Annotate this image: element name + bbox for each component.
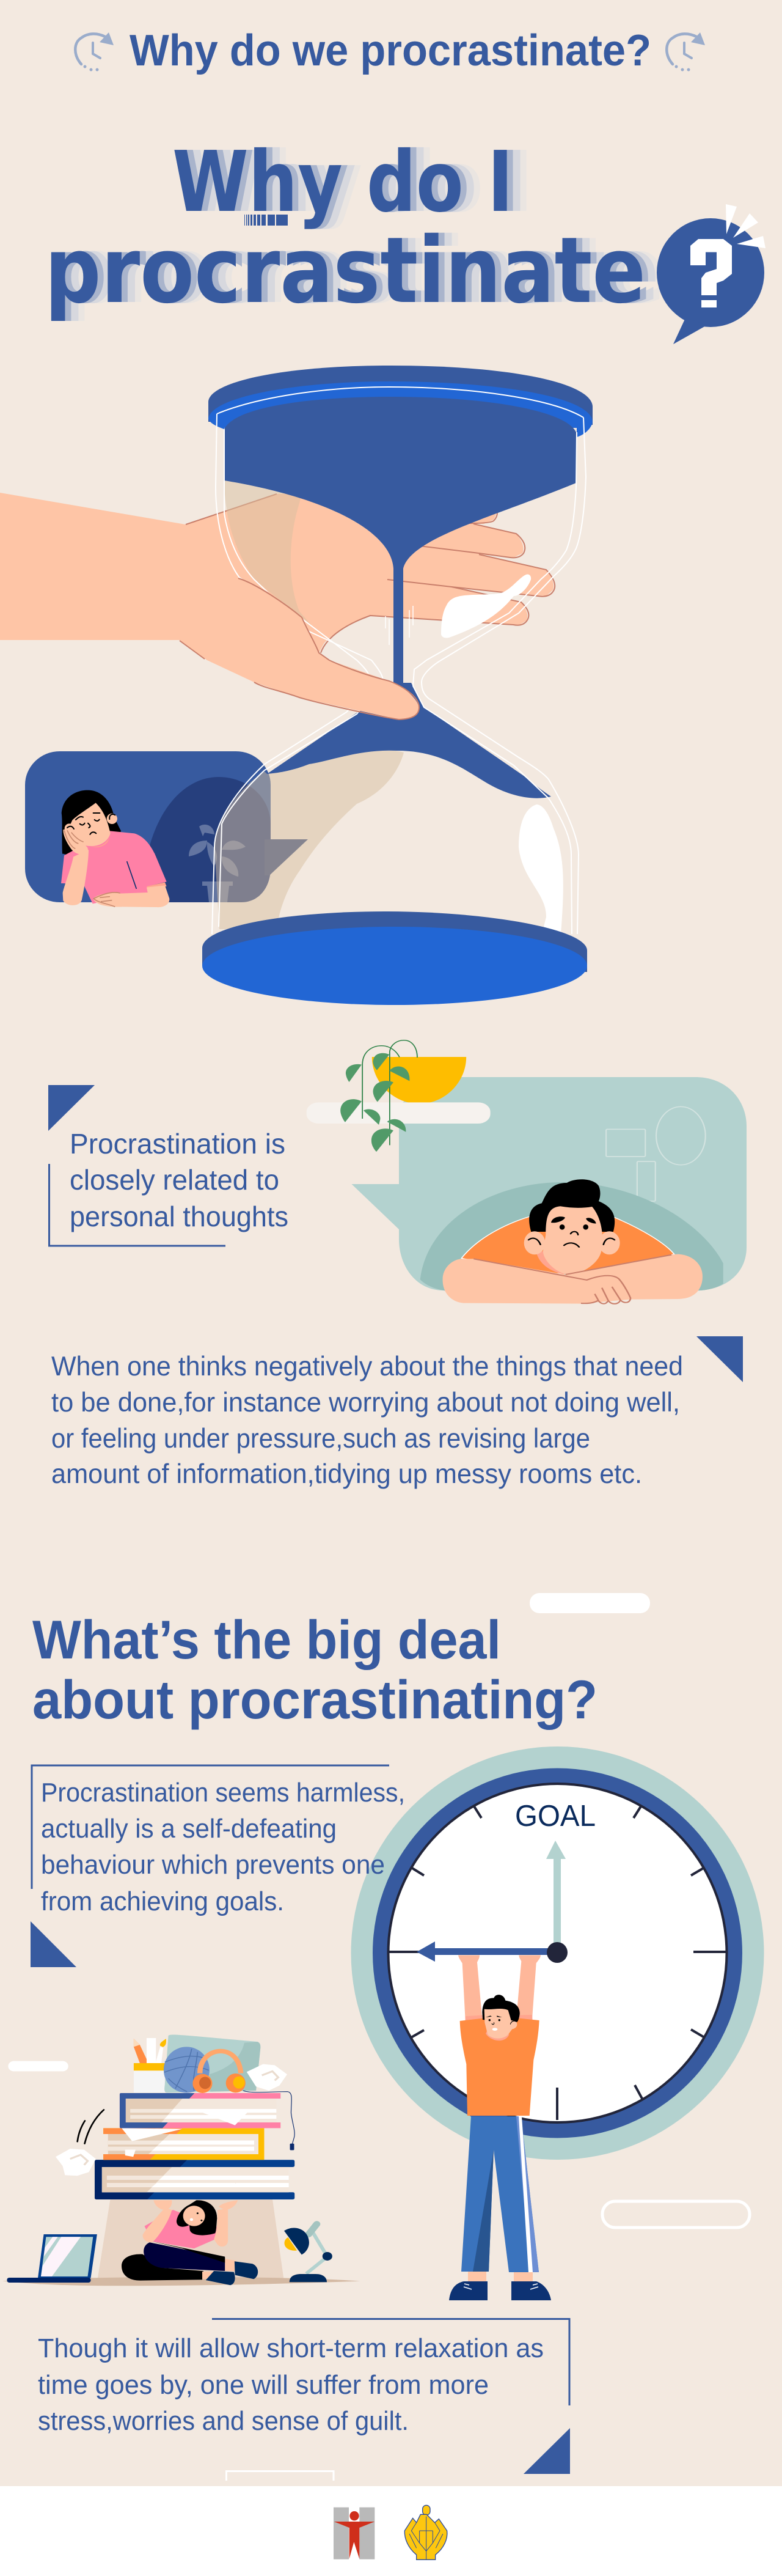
top book — [120, 2093, 280, 2128]
section heading: about procrastinating? — [32, 1669, 597, 1730]
bracket — [49, 1164, 225, 1246]
paragraph: negative thoughts: When one thinks negatively about the things that need — [51, 1352, 683, 1382]
paragraph: negative thoughts: amount of information,tidying up messy rooms etc. — [51, 1459, 642, 1489]
thumb — [153, 578, 419, 719]
lamp — [284, 2224, 332, 2282]
illustration: tired girl — [61, 790, 169, 907]
floor — [2, 2277, 360, 2286]
logo: yellow hands — [404, 2505, 447, 2559]
top cap — [208, 366, 593, 437]
main title: procrastinate — [51, 218, 652, 324]
headphones — [192, 2051, 294, 2150]
text block: Procrastination is — [70, 1128, 285, 1160]
main title: Why do I — [172, 134, 513, 231]
bracket — [212, 2319, 569, 2405]
paragraph: negative thoughts: or feeling under pressure,such as revising large — [51, 1424, 590, 1454]
glass shadow lower — [214, 749, 404, 929]
text: harmless: behaviour which prevents one — [41, 1850, 385, 1880]
main title: Why do I — [192, 134, 533, 231]
main title: procrastinate — [64, 218, 665, 324]
upper sand — [224, 397, 576, 683]
outline pill decoration — [602, 2201, 750, 2228]
motion lines — [78, 2110, 104, 2144]
body — [461, 1216, 674, 1273]
section heading — [32, 1609, 597, 1730]
arms — [443, 1254, 703, 1304]
main title: procrastinate — [58, 218, 659, 324]
dark arch — [420, 1182, 723, 1291]
white highlight bottom — [519, 804, 563, 934]
paragraph: negative thoughts — [51, 1352, 683, 1489]
illustration: sad man in speech bubble — [307, 1040, 747, 1304]
arms up — [458, 1955, 541, 2020]
arm and fingers — [0, 489, 555, 660]
header title: Why do we procrastinate? — [130, 26, 651, 75]
spotlight — [98, 2199, 283, 2278]
text: harmless: from achieving goals. — [41, 1887, 284, 1916]
white pill decoration — [530, 1593, 650, 1613]
icon: clock right — [667, 32, 705, 71]
text: harmless — [32, 1765, 405, 1916]
clock ticks — [389, 1806, 726, 2120]
goal label: GOAL — [515, 1800, 596, 1833]
pot — [372, 1057, 466, 1104]
minute hand — [546, 1841, 566, 1953]
triangle accent — [524, 2428, 570, 2474]
stationery cup — [134, 2038, 166, 2092]
plant — [340, 1040, 417, 1152]
middle book — [103, 2128, 264, 2160]
girl — [122, 2200, 258, 2285]
main title: Why do I — [186, 134, 527, 231]
head — [482, 1995, 520, 2041]
speech bubble — [352, 1077, 747, 1290]
lower sand — [267, 683, 551, 798]
paragraph: stress and guilt: time goes by, one will suffer from more — [38, 2371, 489, 2400]
text block: personal thoughts — [70, 1201, 288, 1232]
bracket — [32, 1765, 389, 1889]
illustration: girl under books — [2, 2034, 360, 2286]
section heading: What’s the big deal — [32, 1609, 501, 1670]
wall frames — [606, 1106, 706, 1201]
triangle accent right — [696, 1336, 743, 1382]
paragraph: stress and guilt: stress,worries and sense of guilt. — [38, 2407, 409, 2436]
pillow — [164, 2034, 260, 2092]
text: harmless: actually is a self-defeating — [41, 1814, 337, 1844]
yarn ball — [164, 2047, 210, 2093]
main title — [45, 134, 665, 324]
crumpled papers — [56, 2064, 287, 2176]
laptop — [7, 2234, 97, 2283]
bottom cap — [202, 911, 587, 1005]
triangle accent — [31, 1921, 76, 1967]
icon: clock left — [75, 32, 114, 71]
illustration: man lifting clock hand — [417, 1941, 568, 2300]
illustration: hourglass with hand — [0, 366, 593, 1005]
shoes — [449, 2281, 551, 2300]
white highlight top — [441, 574, 531, 638]
main title: Why do I — [178, 134, 519, 231]
head — [524, 1179, 620, 1275]
text block: closely related to — [70, 1164, 279, 1196]
shirt — [460, 2018, 539, 2116]
glass outline — [212, 387, 586, 934]
paragraph: negative thoughts: to be done,for instance worrying about not doing well, — [51, 1388, 680, 1418]
legs — [461, 2116, 539, 2281]
triangle accent — [48, 1085, 95, 1131]
white bracket decoration — [226, 2471, 334, 2481]
text lines: Procrastination seems harmless, — [41, 1778, 405, 1808]
bottom book — [95, 2160, 294, 2199]
panel: personal thoughts text — [48, 1085, 288, 1246]
text block — [70, 1128, 288, 1232]
illustration: goal clock — [351, 1746, 764, 2160]
text lines: Though it will allow short-term relaxation as — [38, 2334, 544, 2363]
shelf — [307, 1102, 491, 1124]
plant in panel — [189, 825, 246, 902]
logo: red figure — [334, 2508, 375, 2559]
clock centre — [547, 1942, 568, 1963]
white pill — [8, 2061, 68, 2071]
main title: procrastinate — [45, 218, 646, 324]
paragraph: stress and guilt — [38, 2319, 569, 2436]
icon: question mark speech bubble — [657, 204, 766, 344]
girl panel background — [25, 751, 271, 902]
header bar — [75, 26, 705, 75]
footer — [0, 2486, 782, 2576]
hour hand — [417, 1941, 550, 1962]
glass shadow upper — [224, 477, 312, 625]
